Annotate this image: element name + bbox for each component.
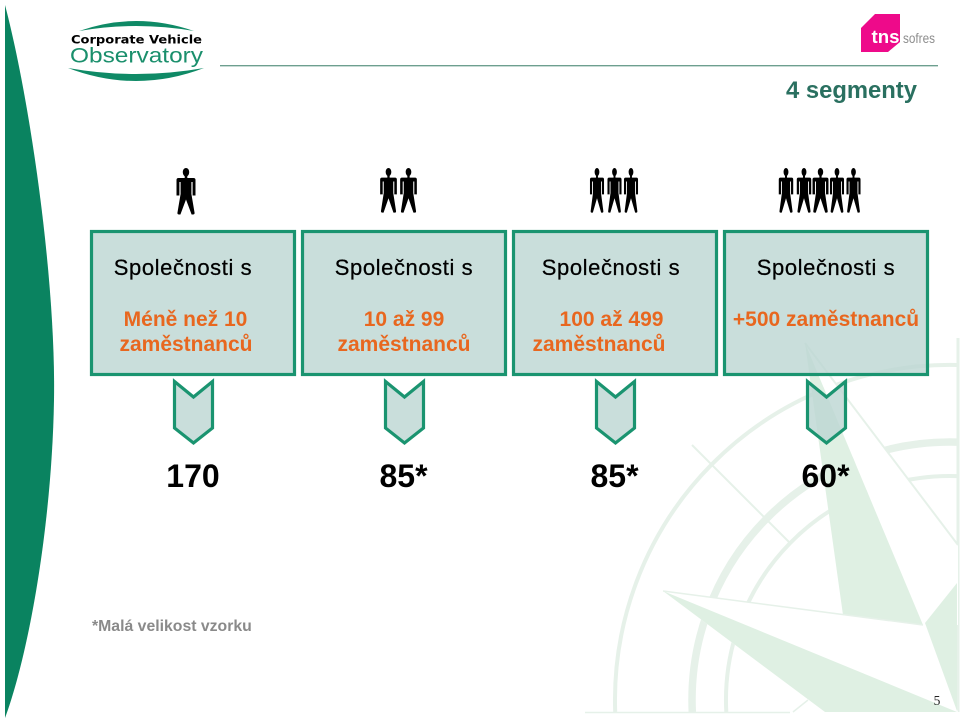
panel: over 500 employees: +500 zaměstnanců <box>733 308 919 331</box>
logo: Corporate Vehicle Observatory: Corporate Vehicle <box>71 32 202 46</box>
logo: TNS sofres: tns <box>872 26 900 47</box>
title: 4 segmenty <box>786 77 918 104</box>
icon: three people <box>590 168 638 213</box>
panel: over 500 employees: Společnosti s <box>757 255 895 280</box>
panel: fewer than 10 employees: Méně než 10 <box>124 308 247 331</box>
icon: two people <box>380 168 417 213</box>
panel: 100 to 499 employees: zaměstnanců <box>532 333 666 356</box>
panel: 10 to 99 employees: 10 až 99 <box>364 308 444 331</box>
icon: five people <box>779 168 861 213</box>
panel: fewer than 10 employees: zaměstnanců <box>119 333 253 356</box>
number: segment 3: 85* <box>590 458 639 494</box>
panel: 10 to 99 employees: zaměstnanců <box>337 333 471 356</box>
logo: TNS sofres <box>861 14 935 52</box>
arrow: segment 4 <box>808 382 846 443</box>
footnote: *Malá velikost vzorku <box>92 618 252 635</box>
logo: Corporate Vehicle Observatory: Observatory <box>70 44 203 68</box>
number: segment 4: 60* <box>801 458 850 494</box>
icon: one person <box>176 168 196 214</box>
panel: 100 to 499 employees <box>514 232 716 374</box>
number: segment 1: 170 <box>166 458 220 494</box>
page number: 5 <box>934 693 941 708</box>
arrow: segment 3 <box>596 382 634 443</box>
panel: over 500 employees <box>724 232 928 374</box>
logo: TNS sofres: sofres <box>903 30 935 46</box>
panel: 100 to 499 employees: 100 až 499 <box>560 308 663 331</box>
arrow: segment 2 <box>386 382 424 443</box>
arrow: segment 1 <box>174 382 212 443</box>
header rule <box>220 65 938 67</box>
logo: Corporate Vehicle Observatory <box>68 21 204 81</box>
panel: 10 to 99 employees <box>302 232 506 374</box>
panel: fewer than 10 employees: Společnosti s <box>114 255 252 280</box>
panel: 100 to 499 employees: Společnosti s <box>542 255 680 280</box>
panel: 10 to 99 employees: Společnosti s <box>335 255 473 280</box>
number: segment 2: 85* <box>379 458 428 494</box>
panel: fewer than 10 employees <box>92 232 294 374</box>
left green sail shape <box>5 5 54 718</box>
compass watermark <box>585 338 958 712</box>
